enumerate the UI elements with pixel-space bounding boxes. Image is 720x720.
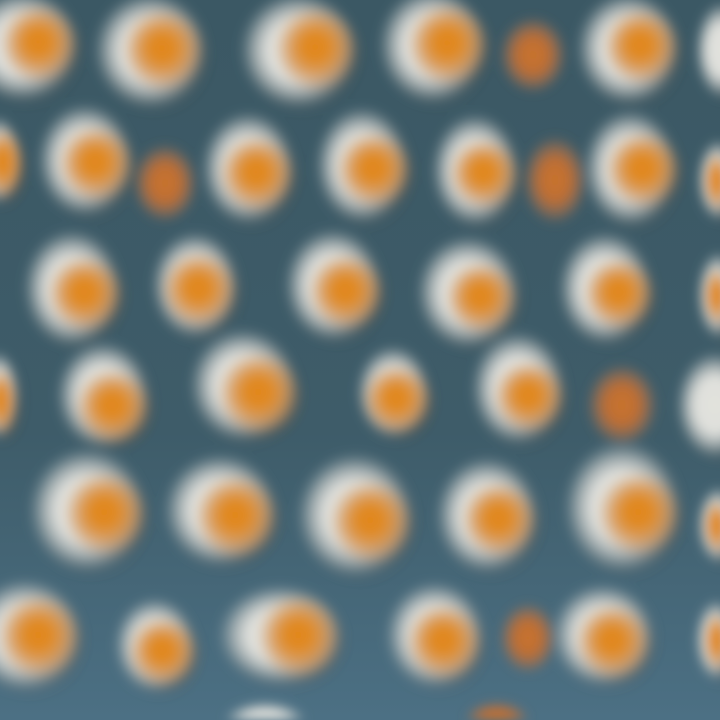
small brown eggs <box>131 15 659 675</box>
bottom edge brown egg <box>463 700 531 720</box>
bottom edge egg white <box>221 700 309 720</box>
